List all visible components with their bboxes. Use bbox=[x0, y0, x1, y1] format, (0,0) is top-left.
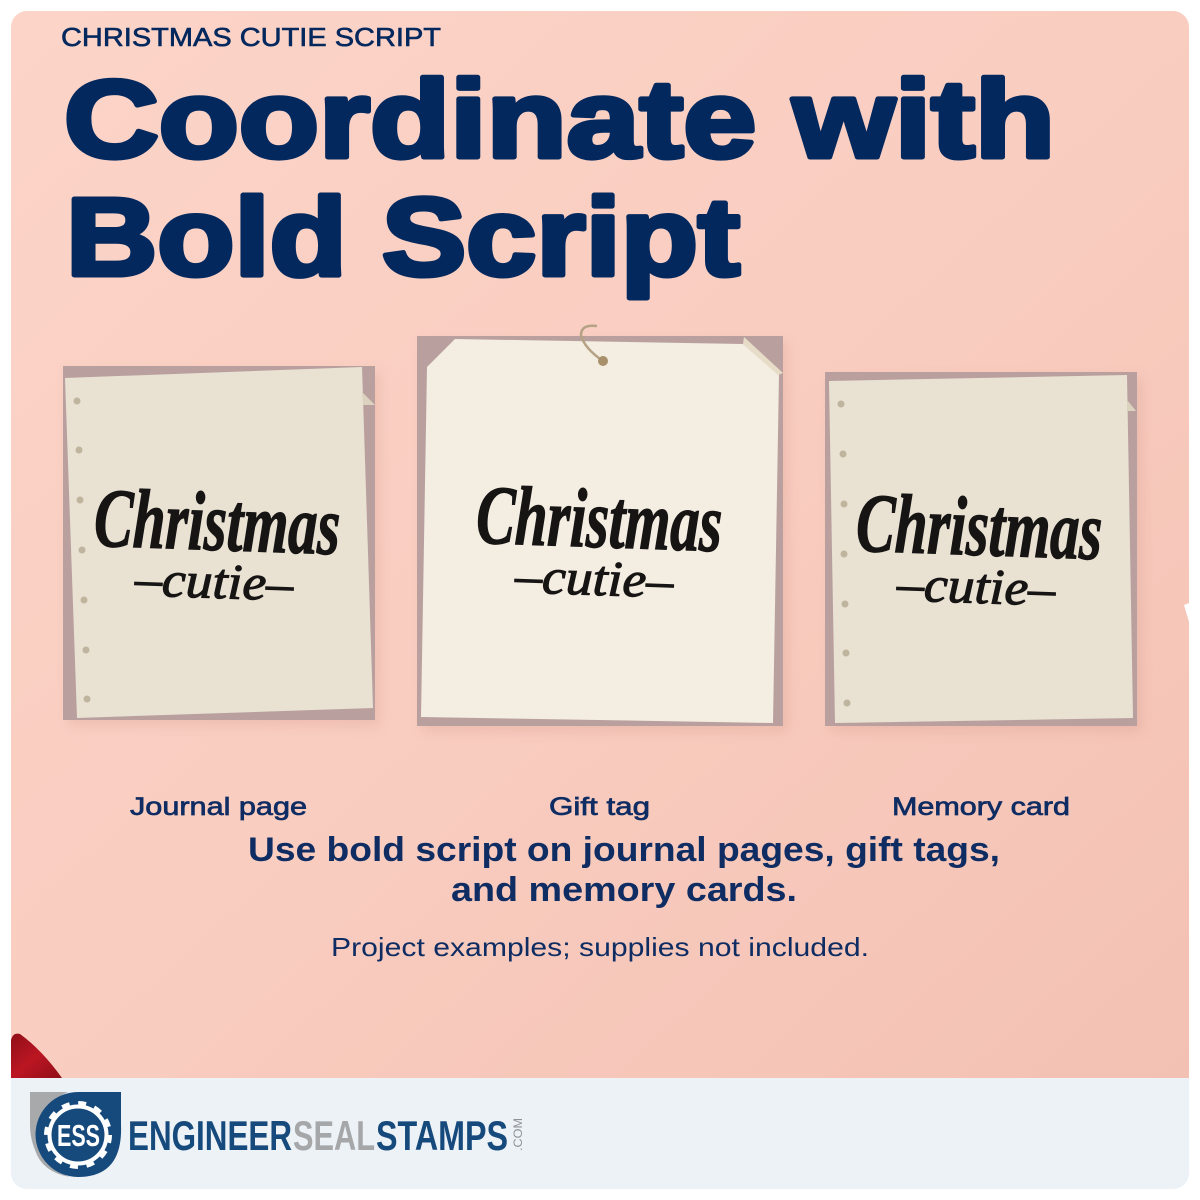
panel: gift tag bbox=[417, 326, 788, 732]
body text: Use bold script on journal pages, gift tags, bbox=[248, 831, 1000, 869]
panel: journal page bbox=[63, 366, 380, 726]
gift tag stamp text bbox=[473, 469, 724, 610]
logo emblem bbox=[30, 1092, 121, 1177]
logo bbox=[30, 1092, 525, 1177]
title: Bold Script bbox=[66, 176, 740, 299]
footer band bbox=[11, 1078, 1189, 1189]
caption: journal page: Journal page bbox=[130, 793, 307, 821]
logo emblem: ESS bbox=[57, 1118, 100, 1153]
journal page stamp text: –cutie– bbox=[133, 550, 295, 612]
memory card stamp text bbox=[853, 477, 1104, 618]
title bbox=[64, 58, 1055, 299]
body text: and memory cards. bbox=[451, 871, 797, 909]
gift tag stamp text: –cutie– bbox=[513, 547, 675, 609]
caption: gift tag: Gift tag bbox=[549, 793, 650, 821]
journal page holes bbox=[74, 398, 90, 702]
logo wordmark: ENGINEER bbox=[128, 1112, 292, 1159]
memory card holes bbox=[838, 400, 850, 706]
logo wordmark: .COM bbox=[511, 1118, 525, 1151]
logo wordmark: SEAL bbox=[293, 1112, 375, 1159]
memory card stamp text: –cutie– bbox=[895, 555, 1057, 617]
panel: memory card bbox=[825, 372, 1142, 732]
logo wordmark bbox=[128, 1112, 525, 1159]
body text bbox=[248, 831, 1000, 909]
eyebrow label: CHRISTMAS CUTIE SCRIPT bbox=[61, 24, 441, 52]
ribbon corner bbox=[11, 1034, 62, 1078]
gift tag stamp text: Christmas bbox=[475, 469, 724, 570]
gift tag hook bbox=[581, 326, 608, 366]
logo wordmark: STAMPS bbox=[376, 1112, 508, 1159]
caption: memory card: Memory card bbox=[892, 793, 1070, 821]
journal page stamp text bbox=[91, 472, 342, 613]
disclaimer: Project examples; supplies not included. bbox=[331, 932, 869, 962]
journal page stamp text: Christmas bbox=[93, 472, 342, 573]
title: Coordinate with bbox=[64, 58, 1055, 181]
